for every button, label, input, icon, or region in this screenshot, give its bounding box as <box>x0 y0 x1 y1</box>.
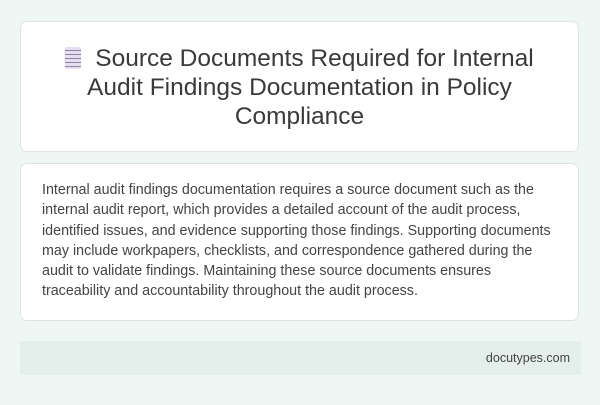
footer: docutypes.com <box>486 351 570 365</box>
title card <box>20 21 579 152</box>
title: Source Documents Required for Internal Audit Findings Documentation in Policy Compliance <box>87 45 534 130</box>
text block: description: traceability and accountability throughout the audit process. <box>42 283 418 299</box>
text block: description: identified issues, and evidence supporting those findings. Supporting documents <box>42 223 551 239</box>
text block: description: may include workpapers, checklists, and correspondence gathered during the <box>42 243 532 259</box>
text block: description: audit to validate findings. Maintaining these source documents ensures <box>42 263 491 279</box>
footer <box>20 341 581 375</box>
text block: description <box>20 163 579 321</box>
text block: description: Internal audit findings documentation requires a source document such as the <box>42 182 534 198</box>
icon: document <box>65 47 81 69</box>
text block: description: internal audit report, which provides a detailed account of the audit process, <box>42 202 520 218</box>
